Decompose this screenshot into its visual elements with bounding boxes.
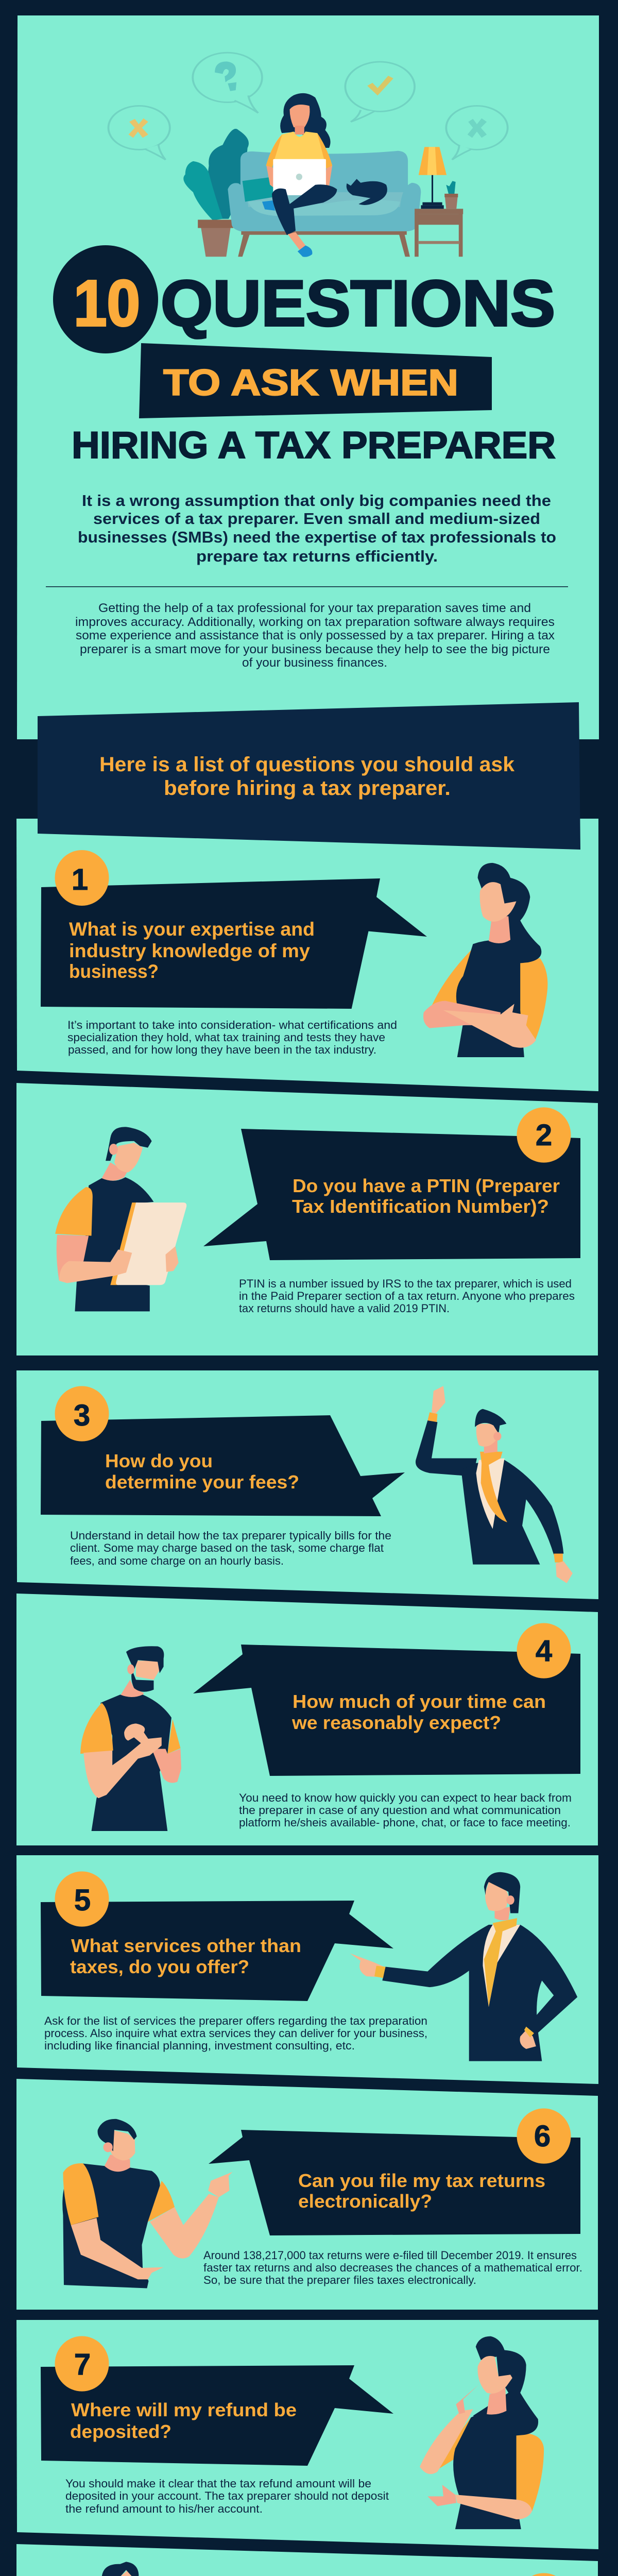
cat bbox=[347, 179, 387, 205]
paragraph: of your business finances. bbox=[242, 656, 387, 670]
paragraph: some experience and assistance that is only possessed by a tax preparer. Hiring a tax bbox=[76, 629, 555, 642]
question 2 bbox=[292, 1175, 560, 1217]
paragraph bbox=[75, 601, 555, 670]
figure: man raising hand bbox=[416, 1386, 573, 1583]
answer 1: passed, and for how long they have been in the tax industry. bbox=[68, 1043, 376, 1056]
intro text: services of a tax preparer. Even small and medium-sized bbox=[93, 510, 540, 528]
figure: woman thinking bbox=[420, 2336, 544, 2529]
question 5 bbox=[70, 1935, 301, 1977]
panel: question 5 bbox=[16, 1855, 598, 2084]
bubble 7 bbox=[41, 2365, 393, 2466]
number badge 7: 7 bbox=[74, 2348, 91, 2381]
question 4 bbox=[291, 1691, 546, 1733]
answer 4: the preparer in case of any question and what communication bbox=[239, 1804, 561, 1817]
number badge 3: 3 bbox=[74, 1399, 90, 1432]
question 1: What is your expertise and bbox=[69, 919, 315, 940]
number badge 5 bbox=[55, 1871, 109, 1927]
title: TO ASK WHEN bbox=[163, 363, 458, 403]
number badge 3 bbox=[55, 1386, 109, 1442]
answer 2: tax returns should have a valid 2019 PTIN. bbox=[239, 1302, 450, 1315]
question 6: electronically? bbox=[298, 2191, 432, 2212]
panel: question 3 bbox=[16, 1370, 598, 1599]
panel: question 8 bbox=[16, 2544, 598, 2576]
intro text: prepare tax returns efficiently. bbox=[196, 547, 438, 565]
paragraph: Getting the help of a tax professional for your tax preparation saves time and bbox=[98, 601, 531, 615]
banner: list of questions: before hiring a tax preparer. bbox=[164, 777, 451, 800]
intro text: It is a wrong assumption that only big companies need the bbox=[82, 492, 551, 510]
bubble 3 bbox=[41, 1415, 405, 1516]
answer 3: fees, and some charge on an hourly basis. bbox=[70, 1554, 284, 1567]
question 3: How do you bbox=[105, 1450, 213, 1471]
intro text bbox=[78, 492, 556, 565]
number badge 6 bbox=[517, 2108, 571, 2164]
question 4: we reasonably expect? bbox=[291, 1712, 501, 1733]
question 1: business? bbox=[69, 961, 159, 982]
answer 7: the refund amount to his/her account. bbox=[65, 2502, 263, 2515]
title bbox=[53, 245, 556, 466]
question 6 bbox=[298, 2170, 545, 2212]
figure: man raising finger bbox=[42, 2562, 252, 2576]
title: 10 bbox=[74, 267, 140, 340]
answer 3 bbox=[70, 1529, 391, 1567]
answer 5: Ask for the list of services the preparer offers regarding the tax preparation bbox=[44, 2014, 427, 2027]
question 1: industry knowledge of my bbox=[69, 940, 310, 961]
number badge 2: 2 bbox=[536, 1118, 552, 1152]
panel: question 7 bbox=[16, 2320, 598, 2549]
answer 2: PTIN is a number issued by IRS to the tax preparer, which is used bbox=[239, 1277, 572, 1290]
answer 4: platform he/sheis available- phone, chat, or face to face meeting. bbox=[239, 1816, 571, 1829]
answer 7 bbox=[65, 2477, 389, 2515]
title: HIRING A TAX PREPARER bbox=[72, 425, 556, 466]
banner: list of questions bbox=[38, 702, 580, 850]
number badge 5: 5 bbox=[74, 1884, 91, 1917]
answer 6: faster tax returns and also decreases the chances of a mathematical error. bbox=[203, 2261, 582, 2274]
figure: woman arms crossed bbox=[423, 863, 547, 1057]
question 4: How much of your time can bbox=[293, 1691, 546, 1712]
bubble 4 bbox=[193, 1645, 580, 1776]
answer 5: process. Also inquire what extra services they can deliver for your business, bbox=[44, 2027, 427, 2040]
question 5: What services other than bbox=[71, 1935, 301, 1956]
figure: man pointing right bbox=[62, 2119, 233, 2288]
answer 6 bbox=[203, 2249, 582, 2286]
answer 3: Understand in detail how the tax preparer typically bills for the bbox=[70, 1529, 391, 1542]
panel: question 6 bbox=[16, 2079, 598, 2310]
question 7: Where will my refund be bbox=[71, 2399, 297, 2420]
question 3: determine your fees? bbox=[105, 1471, 299, 1493]
illustration: woman on sofa with speech bubbles bbox=[108, 53, 508, 257]
answer 2 bbox=[239, 1277, 575, 1315]
banner: list of questions: Here is a list of questions you should ask bbox=[99, 753, 515, 776]
number badge 6: 6 bbox=[534, 2120, 551, 2153]
question 7 bbox=[70, 2399, 297, 2442]
bubble 6 bbox=[209, 2130, 580, 2235]
answer 6: Around 138,217,000 tax returns were e-filed till December 2019. It ensures bbox=[203, 2249, 577, 2262]
bubble 1 bbox=[41, 878, 427, 1009]
answer 4: You need to know how quickly you can expect to hear back from bbox=[239, 1791, 572, 1804]
answer 2: in the Paid Preparer section of a tax return. Anyone who prepares bbox=[239, 1290, 575, 1302]
number badge 1: 1 bbox=[72, 863, 88, 896]
intro text: businesses (SMBs) need the expertise of tax professionals to bbox=[78, 528, 556, 546]
figure: man with clipboard bbox=[55, 1127, 186, 1311]
question 2: Tax Identification Number)? bbox=[292, 1196, 549, 1217]
number badge 2 bbox=[517, 1107, 571, 1163]
answer 6: So, be sure that the preparer files taxes electronically. bbox=[203, 2274, 476, 2286]
paragraph: preparer is a smart move for your business because they help to see the big picture bbox=[80, 642, 550, 656]
answer 5: including like financial planning, investment consulting, etc. bbox=[44, 2039, 355, 2052]
sofa bbox=[241, 151, 408, 207]
title: QUESTIONS bbox=[161, 267, 555, 340]
panel: header bbox=[17, 15, 599, 739]
panel: question 1 bbox=[16, 819, 598, 1091]
paragraph: improves accuracy. Additionally, working on tax preparation software always requires bbox=[75, 615, 555, 629]
bubble 2 bbox=[203, 1129, 580, 1260]
woman bbox=[280, 93, 331, 148]
question 2: Do you have a PTIN (Preparer bbox=[293, 1175, 560, 1196]
question 7: deposited? bbox=[70, 2421, 171, 2442]
plant bbox=[208, 129, 249, 219]
answer 7: You should make it clear that the tax refund amount will be bbox=[65, 2477, 371, 2490]
figure: bearded man bbox=[80, 1646, 181, 1831]
number badge 7 bbox=[55, 2336, 109, 2392]
panel: question 2 bbox=[16, 1083, 598, 1355]
answer 1: It’s important to take into consideration- what certifications and bbox=[67, 1019, 397, 1031]
number badge 1 bbox=[55, 850, 109, 906]
question 3 bbox=[105, 1450, 299, 1493]
answer 3: client. Some may charge based on the task, some charge flat bbox=[70, 1541, 384, 1554]
table and lamp bbox=[415, 209, 463, 214]
answer 7: deposited in your account. The tax preparer should not deposit bbox=[65, 2489, 389, 2502]
question 1 bbox=[69, 919, 315, 982]
answer 1: specialization they hold, what tax training and tests they have bbox=[67, 1031, 385, 1044]
answer 5 bbox=[44, 2014, 427, 2052]
question 6: Can you file my tax returns bbox=[298, 2170, 545, 2191]
panel: question 4 bbox=[16, 1594, 598, 1845]
number badge 8 bbox=[517, 2573, 571, 2576]
answer 4 bbox=[239, 1791, 572, 1829]
number badge 4 bbox=[517, 1623, 571, 1679]
bubble 5 bbox=[41, 1901, 393, 2001]
answer 1 bbox=[67, 1019, 397, 1056]
figure: man in suit pointing bbox=[350, 1872, 577, 2061]
question 5: taxes, do you offer? bbox=[70, 1956, 249, 1977]
number badge 4: 4 bbox=[536, 1634, 552, 1668]
